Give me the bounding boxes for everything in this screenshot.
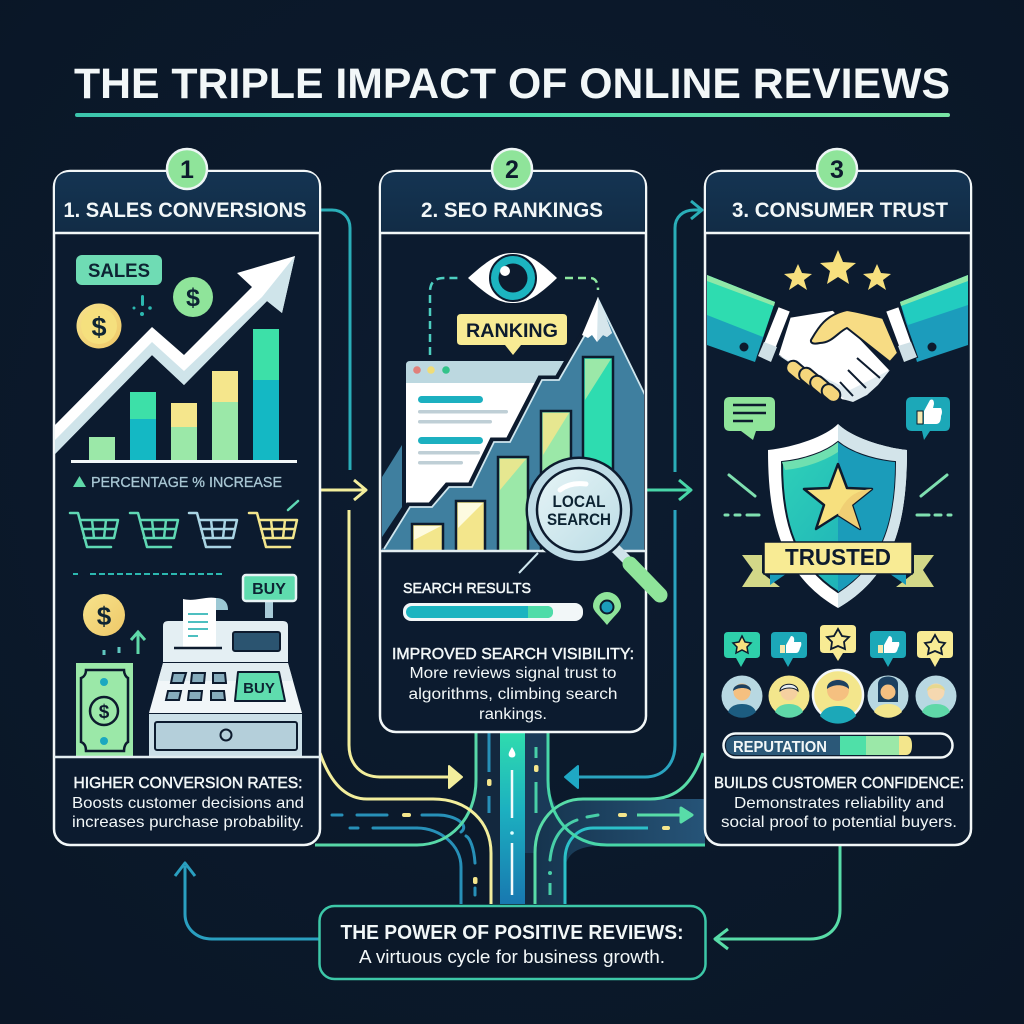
badge 3 [817, 149, 857, 189]
reputation meter [724, 734, 952, 758]
icon: magnifying glass: SEARCH [547, 510, 611, 529]
icon: yellow dollar coin [76, 304, 122, 348]
avatar 1 [722, 676, 762, 718]
sparks [725, 475, 951, 515]
panel: consumer trust [705, 149, 971, 845]
text: improved search visibility [392, 646, 634, 723]
icon: comment bubble [724, 397, 775, 440]
avatar 4 [868, 676, 908, 718]
icon: cash register: BUY [243, 680, 275, 697]
icon: dollar coin [83, 594, 125, 636]
road markings [332, 733, 670, 895]
badge 2: 2 [505, 156, 519, 184]
chart: mountain and stair chart [382, 297, 646, 554]
heading: 2. SEO RANKINGS [421, 199, 603, 222]
label: search results: SEARCH RESULTS [403, 581, 531, 597]
text: builds customer confidence [714, 775, 964, 831]
ribbon: trusted: TRUSTED [785, 544, 891, 570]
arrow: growth trend [55, 256, 295, 454]
text: builds customer confidence: social proof to potential buyers. [721, 814, 957, 831]
title: THE TRIPLE IMPACT OF ONLINE REVIEWS [74, 60, 950, 108]
badge 1: 1 [180, 156, 194, 184]
label: sales [76, 255, 162, 285]
curved lanes [315, 733, 705, 904]
sign: buy [243, 575, 296, 618]
icon: banknote [76, 663, 133, 756]
browser window [406, 361, 565, 505]
icon: handshake [707, 275, 968, 405]
callout: power of positive reviews [320, 906, 706, 979]
icon: shield with star [768, 424, 907, 608]
arrow: small up [104, 632, 145, 655]
text: improved search visibility: algorithms, climbing search [408, 686, 618, 703]
panel: sales conversions [54, 149, 320, 845]
dashed guides [430, 278, 462, 355]
icon: magnifying glass [526, 456, 660, 595]
icon: green dollar coin: $ [186, 284, 200, 312]
text: higher conversion rates: increases purchase probability. [72, 814, 304, 831]
badge 2 [492, 149, 532, 189]
label: ranking [457, 314, 567, 355]
ribbon: trusted [742, 542, 934, 587]
icon: banknote: $ [99, 702, 110, 723]
icons: shopping carts [70, 501, 298, 547]
reputation meter: REPUTATION [733, 739, 827, 756]
arrow: lane right [637, 808, 692, 822]
text: higher conversion rates: HIGHER CONVERSION RATES: [74, 775, 302, 792]
text: improved search visibility: IMPROVED SEARCH VISIBILITY: [392, 646, 634, 663]
avatars [722, 670, 956, 724]
heading: 1. SALES CONVERSIONS [64, 199, 306, 222]
arrow: SEO to trust [565, 201, 702, 788]
icon: yellow dollar coin: $ [91, 312, 107, 342]
avatar 2 [768, 676, 810, 718]
callout: power of positive reviews: THE POWER OF POSITIVE REVIEWS: [340, 922, 684, 944]
icon: green dollar coin [173, 277, 213, 317]
text: improved search visibility: rankings. [479, 706, 547, 723]
label: percentage increase: PERCENTAGE % INCREASE [91, 474, 282, 491]
review bubbles [724, 625, 953, 667]
panel: SEO rankings [380, 149, 660, 732]
arrow: sales to SEO [320, 210, 462, 788]
label: ranking: RANKING [466, 321, 558, 342]
text: improved search visibility: More reviews signal trust to [410, 665, 616, 682]
badge 3: 3 [830, 156, 844, 184]
sign: buy: BUY [252, 581, 286, 598]
text: builds customer confidence: BUILDS CUSTOMER CONFIDENCE: [714, 775, 964, 792]
text: higher conversion rates: Boosts customer decisions and [72, 795, 304, 812]
text: higher conversion rates [72, 775, 304, 831]
badge 1 [167, 149, 207, 189]
connector: central road network [315, 733, 705, 904]
sparkle [132, 295, 152, 316]
text: builds customer confidence: Demonstrates reliability and [734, 795, 944, 812]
arrow: cycle back left [175, 863, 319, 939]
avatar 5 [916, 676, 956, 718]
icon: dollar coin: $ [97, 601, 112, 631]
icon: thumbs up bubble [906, 397, 950, 440]
avatar 3 [813, 670, 863, 724]
bar chart [71, 329, 297, 463]
icon: location pin [593, 592, 621, 625]
callout: power of positive reviews: A virtuous cycle for business growth. [359, 947, 665, 967]
label: sales: SALES [88, 261, 150, 282]
icon: cash register [149, 575, 302, 756]
icon: magnifying glass: LOCAL [552, 492, 606, 511]
icon: eye [468, 253, 557, 303]
arrow: cycle back right [715, 846, 840, 949]
progress bar [403, 603, 583, 621]
icons: three stars [784, 250, 891, 290]
heading: 3. CONSUMER TRUST [732, 199, 948, 222]
